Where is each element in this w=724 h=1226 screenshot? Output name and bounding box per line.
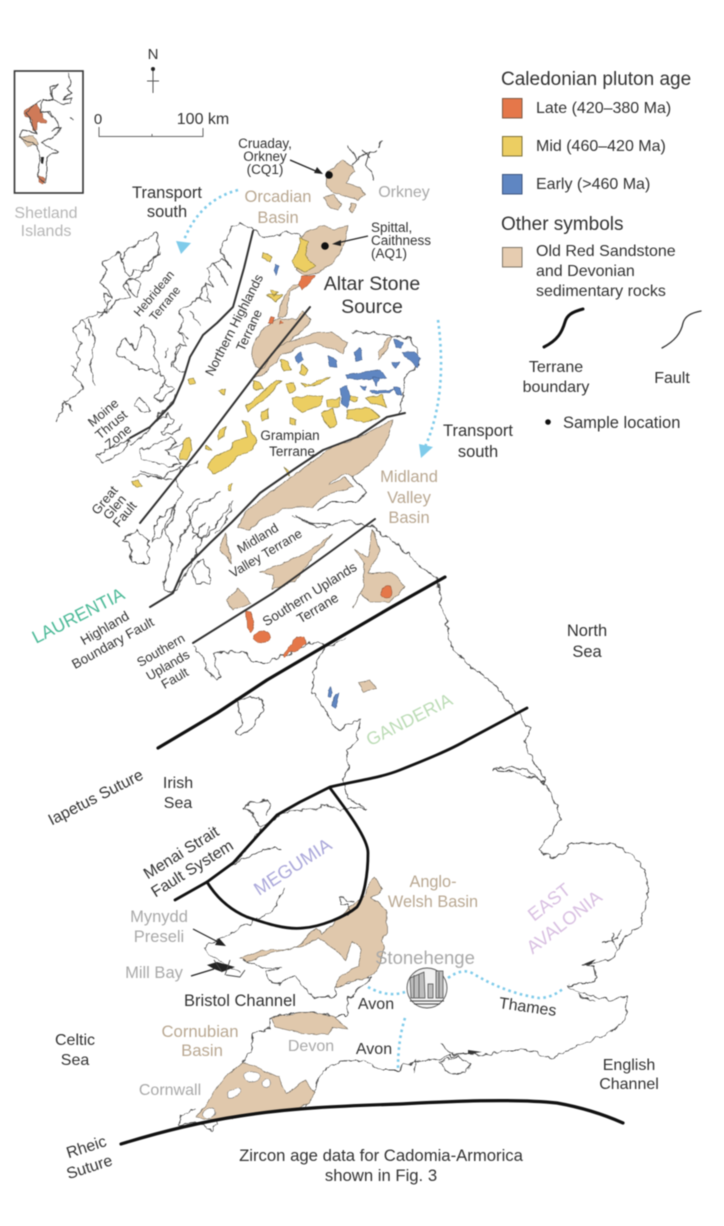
label: Celtic Sea: Celtic: [55, 1032, 95, 1049]
label: Devon: Devon: [288, 1038, 334, 1055]
label: Great Glen Fault: [88, 483, 140, 530]
label: Thames: Thames: [498, 995, 557, 1020]
label: Orkney: Orkney: [378, 184, 430, 201]
legend: Caledonian pluton age: [501, 69, 691, 194]
label: Stonehenge: Stonehenge: [375, 947, 475, 968]
legend: terrane boundary: Terrane: [529, 359, 583, 376]
legend: fault: [654, 311, 701, 387]
label: Irish Sea: Irish: [163, 775, 193, 792]
legend: Old Red Sandstone: Old Red Sandstone: [536, 243, 676, 260]
label: English Channel: English: [603, 1057, 655, 1074]
Moine Thrust Zone: [130, 231, 253, 438]
heading: Orcadian Basin: Orcadian: [245, 188, 311, 206]
label: EAST AVALONIA: EAST: [523, 879, 575, 925]
coast: Isle of Wight and harbours: [410, 930, 620, 1074]
legend: early: Early (>460 Ma): [536, 176, 650, 193]
early-age plutons: [274, 263, 420, 708]
heading: Transport south, east: south: [458, 443, 498, 461]
label: Cruaday, Orkney (CQ1): [238, 136, 292, 177]
legend: early: [502, 174, 650, 194]
label: Spittal, Caithness (AQ1): (AQ1): [371, 246, 407, 261]
scale bar: 100 km: [177, 111, 229, 128]
heading: Transport south, north: Transport: [132, 184, 202, 202]
label: Northern Highlands Terrane: Terrane: [233, 307, 265, 353]
icon: sample location, Spittal: [321, 236, 368, 250]
mid-age plutons: [131, 238, 387, 491]
legend: Old Red Sandstone: [502, 243, 676, 300]
heading: Orcadian Basin: Basin: [257, 209, 299, 227]
label: Moine Thrust Zone: Zone: [102, 421, 134, 452]
label: Great Glen Fault: Great: [88, 483, 121, 517]
Southern Uplands outcrop: [353, 530, 405, 608]
Iapetus Suture: [158, 577, 445, 748]
icon: Stonehenge: [407, 968, 447, 1008]
label: Cornubian Basin: Cornubian: [161, 1022, 239, 1041]
Midland Valley Basin outcrop: [237, 420, 393, 530]
label: Moine Thrust Zone: [85, 395, 134, 452]
Cornwall outcrop: [195, 1063, 314, 1120]
heading: Transport south, north: [132, 184, 202, 221]
legend: mid: [502, 136, 666, 156]
coast: Bristol Channel and Southwest: [180, 960, 371, 1130]
label: Moine Thrust Zone: Thrust: [92, 407, 130, 442]
legend heading: Other symbols: [501, 214, 623, 235]
coast: Isle of Man: [235, 697, 264, 735]
legend: fault: Fault: [654, 370, 690, 387]
label: Anglo-Welsh Basin: [388, 873, 478, 911]
label: Southern Uplands Fault: [134, 630, 193, 692]
coast: Solway to Wales: [193, 638, 365, 973]
Ganderia boundary: [175, 708, 527, 900]
label: Cruaday, Orkney (CQ1): Cruaday,: [238, 136, 292, 151]
label: Menai Strait Fault System: Fault System: [149, 837, 237, 901]
legend: Old Red Sandstone: sedimentary rocks: [536, 283, 666, 300]
label: Hebridean Terrane: Hebridean: [131, 268, 177, 319]
label: MEGUMIA: MEGUMIA: [250, 833, 336, 899]
coast: southwest Highlands and lochs: [97, 395, 233, 592]
scale bar: [94, 111, 229, 136]
label: Iapetus Suture: Iapetus Suture: [46, 767, 146, 829]
label: Celtic Sea: [55, 1032, 95, 1069]
label: Cruaday, Orkney (CQ1): Orkney: [243, 149, 287, 164]
heading: Altar Stone Source: Source: [341, 296, 403, 318]
north arrow: N: [148, 46, 158, 63]
heading: Altar Stone Source: [324, 273, 420, 318]
label: Avon, north: Avon: [358, 996, 394, 1013]
Highland Boundary Fault: [150, 413, 405, 607]
label: Highland Boundary Fault: Boundary Fault: [69, 614, 157, 672]
arrow: transport south, north: [176, 190, 238, 254]
label: Shetland Islands: Islands: [21, 223, 71, 240]
label: EAST AVALONIA: AVALONIA: [522, 886, 606, 958]
caption: Zircon age data: Zircon age data for Cadomia-Armorica: [239, 1146, 524, 1165]
label: English Channel: [599, 1057, 659, 1093]
label: Spittal, Caithness (AQ1): Spittal,: [371, 220, 412, 235]
label: Rheic Suture: Suture: [65, 1152, 115, 1183]
label: North Sea: [567, 622, 607, 661]
label: Southern Uplands Terrane: Terrane: [294, 590, 341, 626]
heading: Transport south, east: [443, 422, 513, 461]
label: Great Glen Fault: Glen: [100, 492, 129, 522]
coast: Grampian: [350, 332, 418, 413]
heading: Transport south, north: south: [147, 203, 187, 221]
label: Cornwall: Cornwall: [139, 1082, 201, 1099]
label: Mill Bay: Mill Bay: [125, 964, 184, 982]
heading: Midland Valley Basin: Valley: [387, 489, 432, 507]
Orkney outcrops: [323, 160, 365, 213]
heading: Transport south, east: Transport: [443, 422, 513, 440]
label: Celtic Sea: Sea: [61, 1052, 89, 1069]
label: Shetland Islands: [14, 205, 78, 240]
label: Grampian Terrane: [260, 428, 320, 459]
arrow: Mynydd Preseli: [193, 929, 226, 946]
icon: sample location, Cruaday: [290, 160, 333, 179]
Rheic Suture: [121, 1101, 623, 1144]
label: Cornubian Basin: Basin: [181, 1041, 223, 1060]
heading: Midland Valley Basin: Basin: [388, 509, 430, 527]
label: Rheic Suture: [65, 1133, 115, 1183]
heading: Midland Valley Basin: Midland: [380, 468, 438, 486]
scale bar: 0: [94, 111, 102, 128]
coast: Hebrides: [57, 233, 160, 422]
label: Avon, south: Avon: [356, 1041, 392, 1058]
label: Southern Uplands Fault: Uplands: [143, 646, 193, 684]
label: Irish Sea: [163, 775, 193, 812]
Old Red Sandstone outcrops: [195, 140, 405, 1120]
label: Midland Valley Terrane: Valley Terrane: [227, 526, 305, 581]
label: Bristol Channel: Bristol Channel: [184, 992, 296, 1010]
label: Cornubian Basin: [161, 1022, 239, 1060]
inset: Shetland Islands: [14, 71, 83, 193]
Southern Uplands Fault: [193, 519, 375, 643]
label: English Channel: Channel: [599, 1076, 659, 1093]
label: Spittal, Caithness (AQ1): Caithness: [371, 233, 431, 248]
faults: [130, 231, 405, 643]
late-age plutons: [246, 275, 392, 658]
heading: Orcadian Basin: [245, 188, 311, 227]
label: Moine Thrust Zone: Moine: [85, 395, 121, 430]
label: Southern Uplands Fault: Fault: [158, 664, 191, 692]
Great Glen Fault: [140, 307, 310, 523]
legend: terrane boundary: boundary: [523, 379, 589, 396]
label: Mynydd Preseli: Mynydd: [130, 908, 188, 926]
label: Cruaday, Orkney (CQ1): (CQ1): [247, 162, 283, 177]
label: Hebridean Terrane: Terrane: [146, 283, 184, 324]
label: Grampian Terrane: Terrane: [269, 444, 315, 459]
coast: southern Scotland and eastern England: [292, 516, 648, 1107]
label: Mynydd Preseli: Preseli: [134, 928, 184, 946]
heading: Midland Valley Basin: [380, 468, 438, 527]
caption: Zircon age data: [239, 1146, 524, 1185]
label: Northern Highlands Terrane: Northern Highlands: [202, 271, 266, 378]
legend: late: Late (420–380 Ma): [536, 100, 671, 117]
legend heading: Caledonian pluton age: [501, 69, 691, 90]
label: Grampian Terrane: Grampian: [260, 428, 320, 443]
label: Mynydd Preseli: [130, 908, 188, 946]
coastline: [57, 224, 648, 1130]
label: LAURENTIA: LAURENTIA: [29, 584, 128, 647]
label: Shetland Islands: Shetland: [14, 205, 78, 222]
legend: mid: Mid (460–420 Ma): [536, 138, 666, 155]
legend: other symbols: [501, 214, 701, 432]
legend: late: [502, 98, 671, 118]
label: Rheic Suture: Rheic: [65, 1133, 109, 1162]
label: Anglo-Welsh Basin: Welsh Basin: [388, 893, 478, 911]
label: North Sea: Sea: [572, 643, 603, 661]
arrow: Mill Bay: [191, 960, 245, 977]
Great Glen outcrops: [279, 285, 302, 317]
label: Highland Boundary Fault: Highland: [78, 608, 132, 648]
label: Irish Sea: Sea: [164, 795, 192, 812]
rivers Avon and Thames: [368, 971, 564, 1068]
coast: north and west mainland: [117, 224, 302, 412]
Southern Midland outcrops: [260, 533, 333, 590]
label: Southern Uplands Fault: Southern: [134, 630, 187, 670]
label: Menai Strait Fault System: Menai Strait: [141, 823, 223, 883]
Megumia boundary: [207, 788, 368, 928]
harbour marks: [468, 959, 596, 1054]
label: Southern Uplands Terrane: Southern Uplands: [260, 559, 360, 629]
north arrow: [147, 46, 159, 93]
arrow: transport south, east: [419, 320, 441, 458]
Devon outcrop: [271, 1012, 348, 1035]
label: North Sea: North: [567, 622, 607, 640]
label: GANDERIA: GANDERIA: [363, 689, 456, 750]
label: Great Glen Fault: Fault: [110, 498, 140, 530]
heading: Altar Stone Source: Altar Stone: [324, 273, 420, 295]
legend: Old Red Sandstone: and Devonian: [536, 263, 635, 280]
label: Midland Valley Terrane: Midland: [234, 520, 281, 556]
label: Spittal, Caithness (AQ1): [371, 220, 431, 261]
Caithness outcrop: [295, 226, 348, 276]
label: Anglo-Welsh Basin: Anglo-: [409, 873, 457, 891]
caption: Zircon age data: shown in Fig. 3: [325, 1166, 437, 1185]
Anglo-Welsh Basin outcrop: [240, 877, 387, 988]
legend: terrane boundary: [523, 309, 589, 396]
legend: sample location: Sample location: [563, 414, 680, 432]
